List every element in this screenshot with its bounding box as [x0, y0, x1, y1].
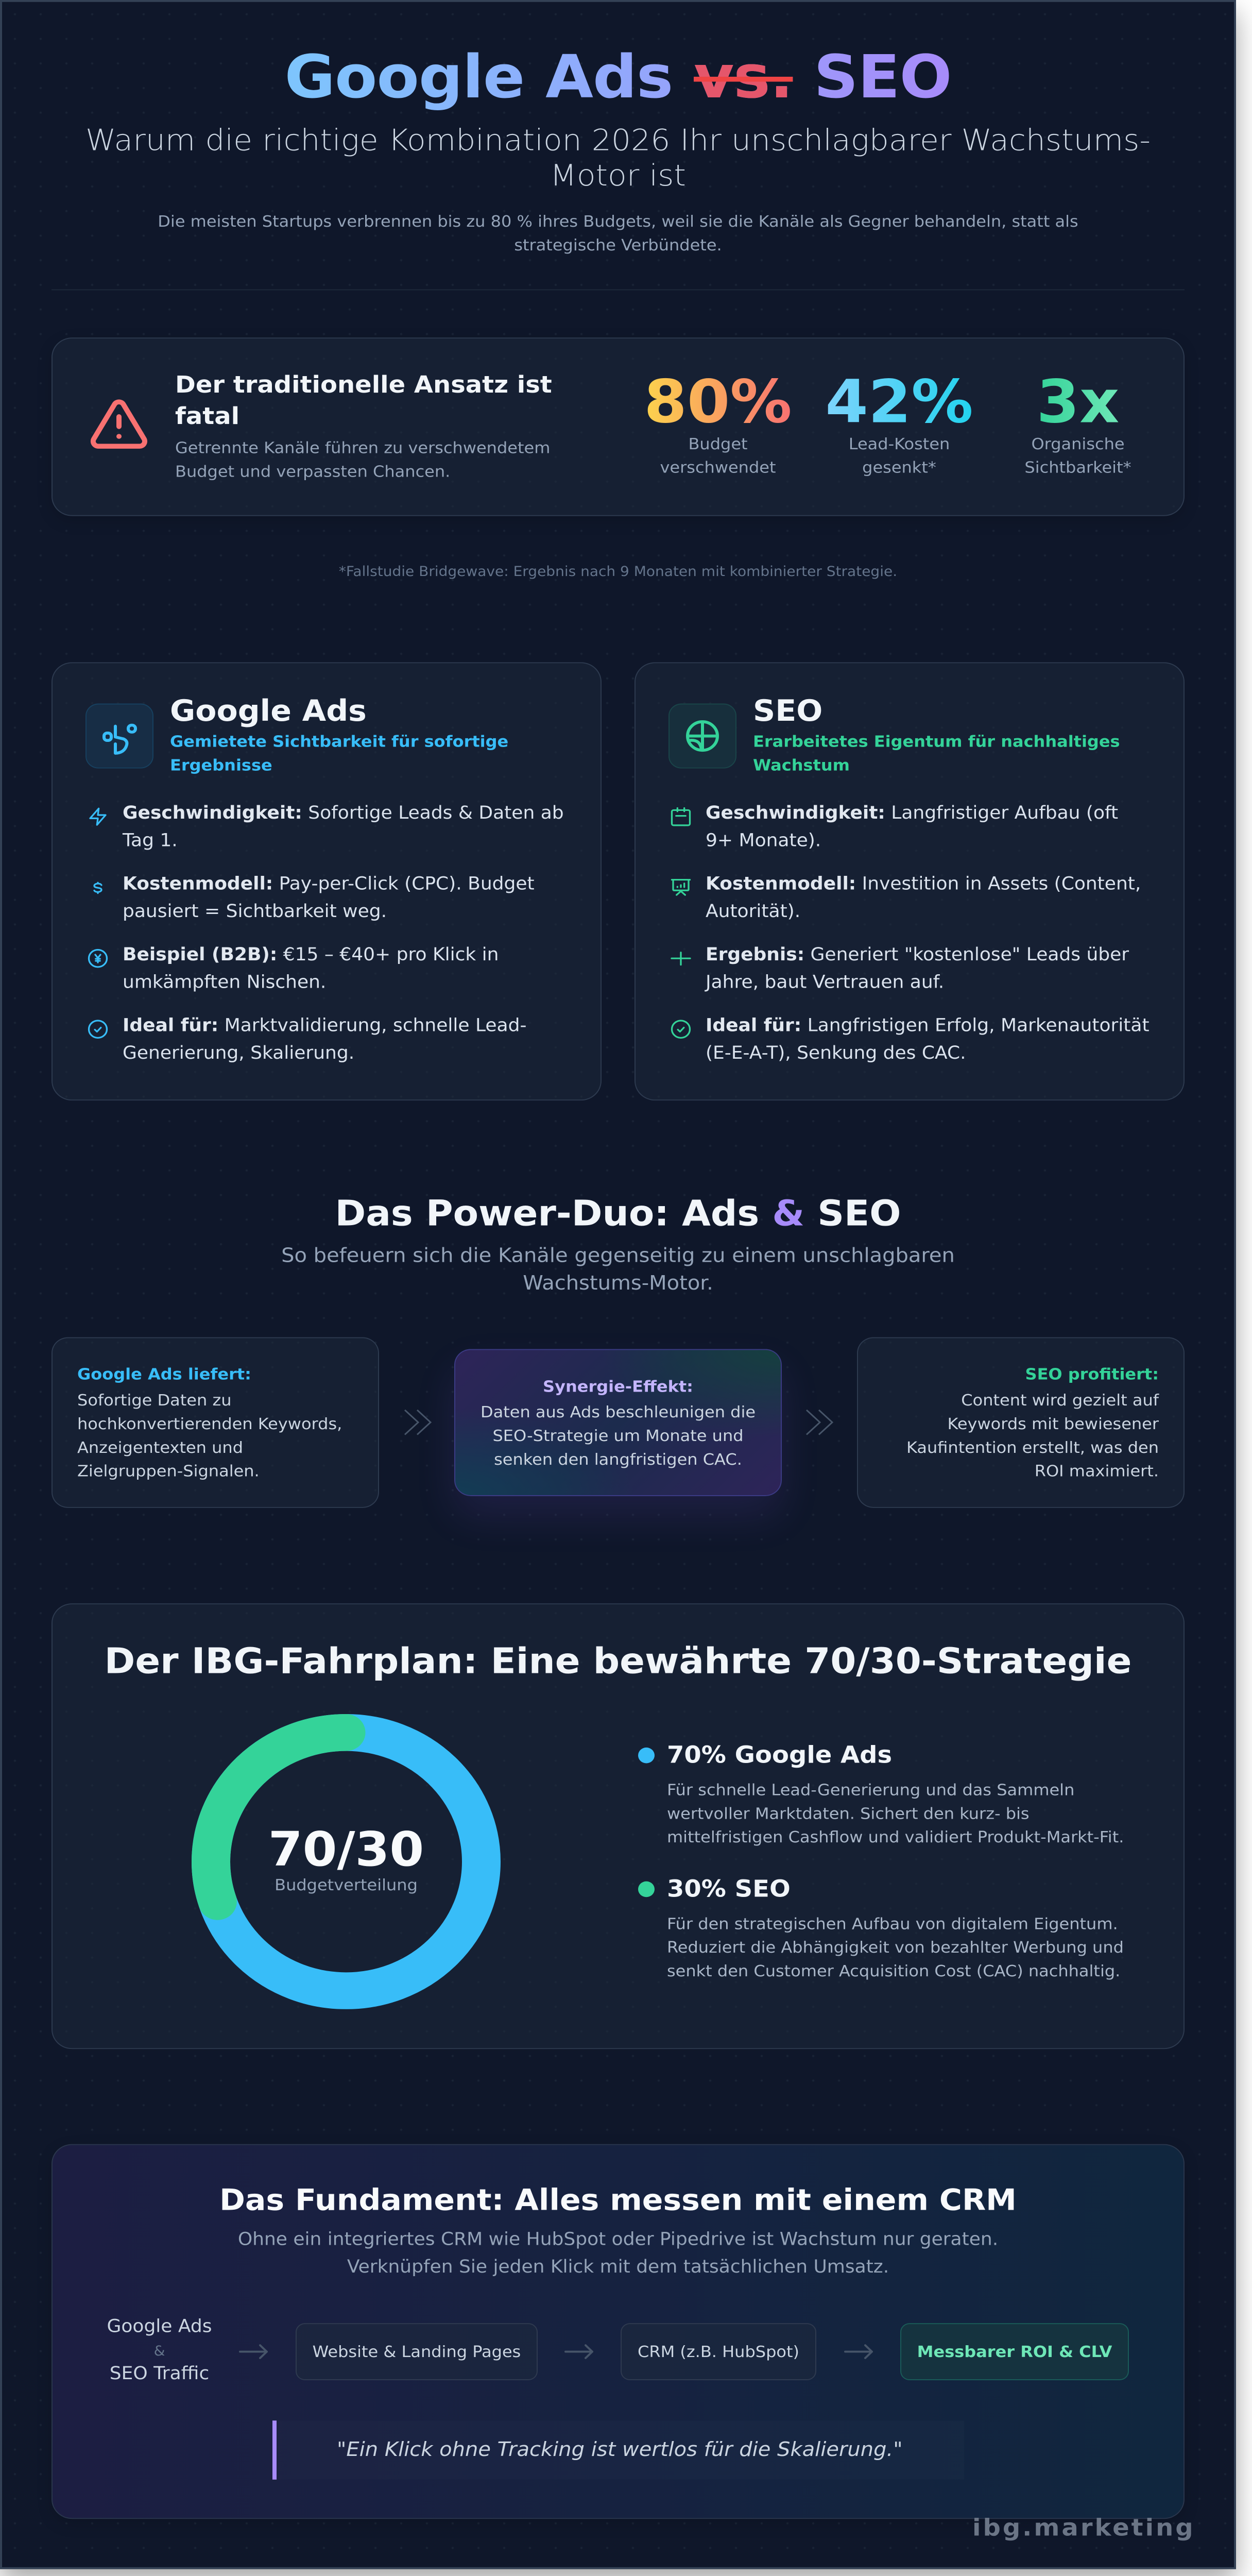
flow step: website: [296, 2323, 538, 2380]
panel: SEO profits: [857, 1337, 1185, 1508]
subtitle: [85, 123, 1151, 193]
body: senken den langfristigen CAC.: [494, 1450, 742, 1468]
legend text: [667, 1778, 1124, 1849]
body: Sofortige Daten zu: [77, 1391, 232, 1410]
list item: example: [88, 944, 499, 992]
list item: speed: Geschwindigkeit: Sofortige Leads & Daten ab: [123, 803, 564, 823]
label: Google Ads liefert:: [77, 1365, 251, 1383]
flow source: traffic: SEO Traffic: [110, 2363, 209, 2384]
tagline: SEO: [753, 732, 1120, 774]
quote: [272, 2420, 964, 2480]
list item: ideal for: Generierung, Skalierung.: [123, 1043, 354, 1063]
list item: speed: 9+ Monate).: [706, 831, 821, 851]
panel: 70/30 roadmap: [52, 1603, 1185, 2049]
list item: example: umkämpften Nischen.: [123, 972, 326, 992]
heading: Das Fundament: Alles messen mit einem CRM: [219, 2183, 1017, 2217]
heading: power duo: Das Power-Duo: Ads & SEO: [335, 1193, 901, 1234]
legend dot: [638, 1882, 655, 1897]
stat: 3x: [1024, 368, 1131, 477]
panel: Google Ads delivers: [52, 1337, 379, 1508]
arrow: chevrons left: [402, 1407, 435, 1437]
stat: 3x: 3x: [1037, 368, 1119, 436]
panel: CRM foundation: [52, 2144, 1185, 2519]
legend text: Für den strategischen Aufbau von digitalem Eigentum.: [667, 1914, 1118, 1933]
panel: synergy effect: [454, 1349, 782, 1496]
legend text: wertvoller Marktdaten. Sichert den kurz- bis: [667, 1804, 1030, 1823]
legend title: 30% SEO: [667, 1875, 791, 1903]
flow source: traffic: &: [154, 2343, 165, 2359]
subtitle: Warum die richtige Kombination 2026 Ihr unschlagbarer Wachstums-: [85, 123, 1151, 158]
quote: "Ein Klick ohne Tracking ist wertlos für die Skalierung.": [337, 2438, 903, 2461]
body: hochkonvertierenden Keywords,: [77, 1414, 342, 1433]
stat: 80%: [644, 368, 792, 477]
arrow: chevrons right: [803, 1407, 836, 1437]
tagline: SEO: Wachstum: [753, 756, 850, 774]
legend: Google Ads: [638, 1740, 1133, 1853]
legend text: senkt den Customer Acquisition Cost (CAC) nachhaltig.: [667, 1961, 1120, 1980]
description: [52, 2226, 1185, 2281]
list item: speed: [89, 803, 564, 851]
intro text: strategische Verbündete.: [514, 235, 722, 255]
flow step: CRM: [621, 2323, 816, 2380]
body: Keywords mit bewiesener: [947, 1414, 1159, 1433]
arrow: [238, 2342, 269, 2362]
power duo subtitle: Wachstums-Motor.: [523, 1272, 713, 1294]
stat: 42%: gesenkt*: [862, 458, 936, 477]
list item: speed: Tag 1.: [123, 831, 178, 851]
icon: Google Ads badge: [85, 704, 153, 769]
alert description: [175, 438, 550, 481]
body: Anzeigentexten und: [77, 1438, 243, 1457]
list item: cost model: [671, 874, 1141, 922]
list item: cost model: Kostenmodell: Investition in Assets (Content,: [706, 874, 1141, 894]
tagline: Google Ads: [170, 732, 508, 774]
stat: 3x: Organische: [1031, 434, 1125, 453]
legend text: Für schnelle Lead-Generierung und das Sammeln: [667, 1781, 1074, 1799]
stat: 80%: verschwendet: [660, 458, 776, 477]
footnote: *Fallstudie Bridgewave: Ergebnis nach 9 Monaten mit kombinierter Strategie.: [339, 563, 897, 580]
alert heading: Der traditionelle Ansatz ist: [175, 371, 552, 398]
donut value: 70/30: [268, 1822, 424, 1877]
donut label: Budgetverteilung: [275, 1875, 418, 1894]
heading: Google Ads: Google Ads: [170, 693, 367, 728]
list item: cost model: Kostenmodell: Pay-per-Click (CPC). Budget: [123, 874, 535, 894]
body: [77, 1388, 342, 1483]
alert heading: [175, 371, 552, 430]
legend text: mittelfristigen Cashflow und validiert Produkt-Markt-Fit.: [667, 1828, 1124, 1846]
alert description: Getrennte Kanäle führen zu verschwendetem: [175, 438, 550, 457]
body: Zielgruppen-Signalen.: [77, 1462, 260, 1480]
body: ROI maximiert.: [1035, 1462, 1159, 1480]
legend text: [667, 1912, 1124, 1982]
body: Daten aus Ads beschleunigen die: [481, 1403, 756, 1421]
list item: result: [671, 944, 1129, 992]
description: Ohne ein integriertes CRM wie HubSpot oder Pipedrive ist Wachstum nur geraten.: [238, 2229, 998, 2249]
stat: 3x: Sichtbarkeit*: [1024, 458, 1131, 477]
list item: speed: Geschwindigkeit: Langfristiger Aufbau (oft: [706, 803, 1118, 823]
list item: ideal for: (E-E-A-T), Senkung des CAC.: [706, 1043, 966, 1063]
list item: ideal for: [671, 1015, 1150, 1063]
list item: example: Beispiel (B2B): €15 – €40+ pro Klick in: [123, 944, 499, 965]
watermark: ibg.marketing: [972, 2514, 1195, 2541]
title: Google Ads vs. SEO: [285, 43, 951, 112]
icon: SEO badge: [668, 704, 736, 769]
alert heading: fatal: [175, 402, 239, 430]
body: Kaufintention erstellt, was den: [906, 1438, 1159, 1457]
list item: cost model: pausiert = Sichtbarkeit weg.: [123, 901, 387, 922]
stat: 80%: 80%: [644, 368, 792, 436]
list item: ideal for: Ideal für: Marktvalidierung, schnelle Lead-: [123, 1015, 526, 1036]
list item: ideal for: [88, 1015, 526, 1063]
flow result: ROI: Messbarer ROI & CLV: [917, 2342, 1112, 2361]
tagline: Google Ads: Ergebnisse: [170, 756, 272, 774]
flow result: ROI: [900, 2323, 1129, 2380]
body: SEO-Strategie um Monate und: [492, 1426, 744, 1445]
label: SEO profitiert:: [1025, 1365, 1159, 1383]
power duo subtitle: [0, 1242, 1236, 1297]
alert description: Budget und verpassten Chancen.: [175, 462, 450, 481]
heading: SEO: SEO: [753, 693, 822, 728]
list item: cost model: Autorität).: [706, 901, 800, 922]
description: Verknüpfen Sie jeden Klick mit dem tatsächlichen Umsatz.: [347, 2257, 889, 2277]
stat: 80%: Budget: [688, 434, 748, 453]
list item: result: Ergebnis: Generiert "kostenlose" Leads über: [706, 944, 1129, 965]
body: [454, 1400, 782, 1471]
panel: traditional approach alert: [52, 337, 1185, 516]
stat: 42%: [825, 368, 973, 477]
list item: result: Jahre, baut Vertrauen auf.: [706, 972, 944, 992]
panel: Google Ads: [52, 662, 602, 1100]
legend title: 70% Google Ads: [667, 1741, 892, 1769]
flow source: traffic: Google Ads: [107, 2316, 212, 2336]
donut chart: [192, 1714, 501, 2009]
body: Content wird gezielt auf: [961, 1391, 1159, 1410]
intro text: Die meisten Startups verbrennen bis zu 80 % ihres Budgets, weil sie die Kanäle als Gegner behandeln, statt als: [158, 212, 1078, 231]
arrow: [844, 2342, 874, 2362]
stat: 42%: Lead-Kosten: [849, 434, 950, 453]
legend: SEO: [638, 1874, 1133, 1987]
stat: 42%: 42%: [825, 368, 973, 436]
flow source: traffic: [87, 2315, 232, 2386]
power duo subtitle: So befeuern sich die Kanäle gegenseitig zu einem unschlagbaren: [281, 1244, 955, 1267]
tagline: SEO: Erarbeitetes Eigentum für nachhaltiges: [753, 732, 1120, 751]
heading: Der IBG-Fahrplan: Eine bewährte 70/30-Strategie: [105, 1640, 1131, 1682]
panel: SEO: [634, 662, 1185, 1100]
flow step: CRM: CRM (z.B. HubSpot): [638, 2342, 799, 2361]
legend dot: [638, 1748, 655, 1763]
label: Synergie-Effekt:: [543, 1377, 693, 1396]
intro text: [158, 212, 1078, 255]
list item: speed: [671, 803, 1118, 851]
tagline: Google Ads: Gemietete Sichtbarkeit für sofortige: [170, 732, 508, 751]
list item: cost model: [93, 874, 535, 922]
icon: warning triangle: [91, 399, 147, 449]
subtitle: Motor ist: [550, 158, 686, 193]
body: [906, 1388, 1159, 1483]
legend text: Reduziert die Abhängigkeit von bezahlter Werbung und: [667, 1938, 1124, 1957]
arrow: [564, 2342, 595, 2362]
list item: ideal for: Ideal für: Langfristigen Erfolg, Markenautorität: [706, 1015, 1150, 1036]
flow step: website: Website & Landing Pages: [313, 2342, 521, 2361]
